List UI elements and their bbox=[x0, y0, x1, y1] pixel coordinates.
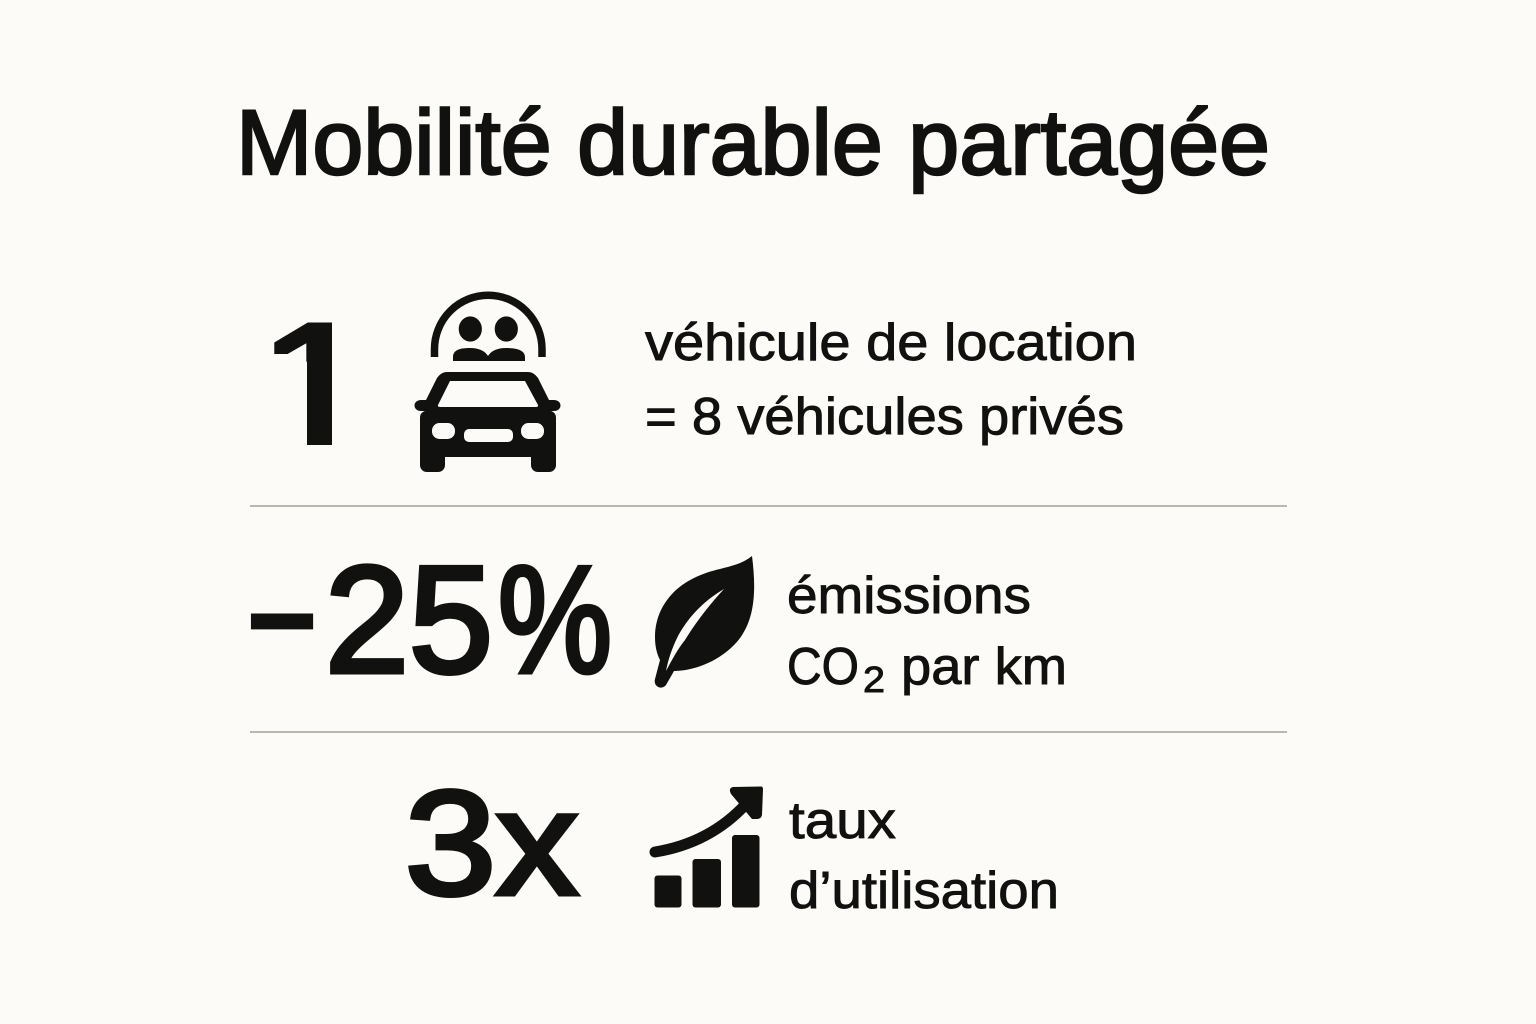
label: utilisation rate bbox=[789, 792, 1059, 920]
label: emissions: par km bbox=[901, 638, 1067, 696]
number: -25%: − bbox=[247, 535, 317, 705]
label: emissions: 2 bbox=[863, 659, 885, 700]
label: emissions: CO bbox=[787, 638, 859, 696]
row 1: car sharing bbox=[274, 292, 1134, 472]
label: vehicle sharing bbox=[645, 314, 1137, 446]
number: 1: 1 bbox=[261, 284, 369, 483]
number: -25% bbox=[247, 535, 612, 705]
label: emissions bbox=[787, 567, 1067, 700]
row 3: utilisation bbox=[405, 761, 1059, 926]
number: 3x: 3x bbox=[405, 761, 578, 926]
label: emissions: émissions bbox=[787, 567, 1031, 625]
label: utilisation rate: taux bbox=[789, 792, 896, 850]
label: vehicle sharing: véhicule de location bbox=[645, 314, 1137, 372]
icon: rising bar chart bbox=[654, 786, 763, 908]
icon: shared car with two passengers bbox=[414, 295, 560, 472]
number: -25%: % bbox=[498, 535, 612, 705]
row 2: emissions bbox=[247, 535, 1067, 705]
label: utilisation rate: d’utilisation bbox=[789, 862, 1059, 920]
title: Mobilité durable partagée bbox=[236, 92, 1270, 194]
icon: leaf bbox=[655, 556, 754, 688]
label: vehicle sharing: = 8 véhicules privés bbox=[645, 388, 1124, 446]
number: -25%: 25 bbox=[325, 535, 493, 705]
